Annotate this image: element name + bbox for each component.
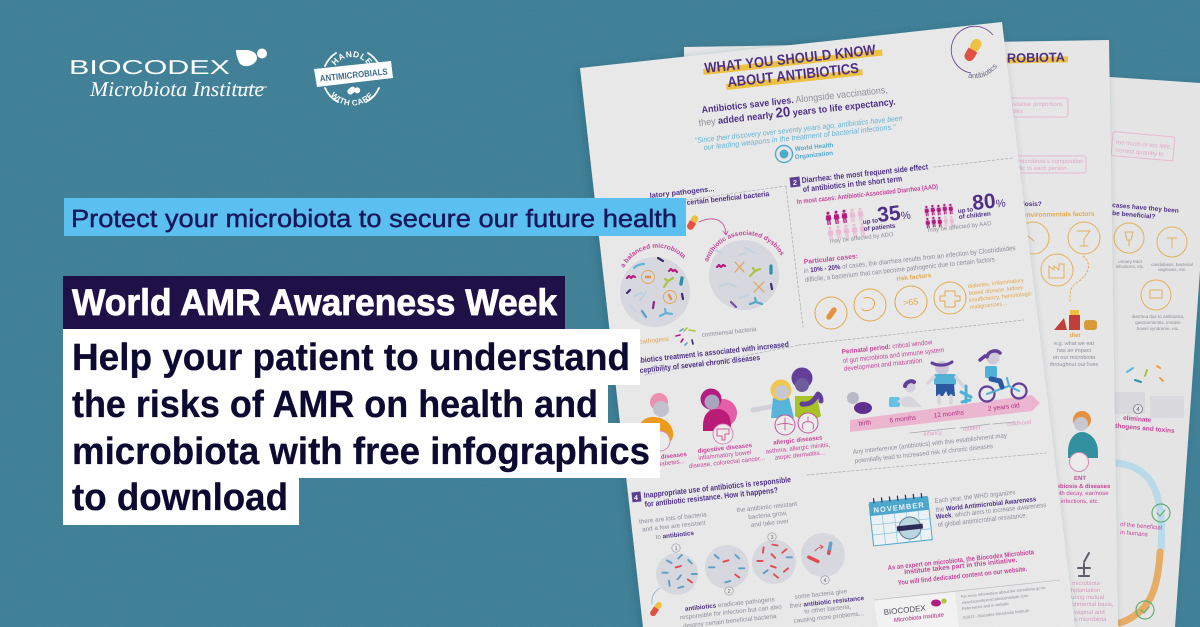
beneficial caption (1120, 521, 1162, 538)
question heading: be beneficial? (1112, 210, 1156, 221)
headline: help your patient: the risks of AMR on health and (72, 384, 598, 426)
diet caption: diet (1070, 332, 1080, 339)
condition captions: urinary tract (1118, 259, 1143, 264)
intro statement: they added nearly 20 years to life expectancy. (698, 92, 896, 129)
risk factors: >65 (903, 296, 919, 308)
calendar with November (869, 493, 932, 546)
figure: digestive disease patient (700, 388, 737, 444)
section 4 heading: 4 (634, 495, 638, 502)
resistance step captions: responsible for infection but can also (680, 603, 783, 622)
pink note boxes: microbiota's composition (1018, 158, 1084, 165)
figure: allergic disease patients (753, 368, 821, 435)
section 4 heading: Inappropriate use of antibiotics is responsible (643, 475, 792, 500)
badge: Handle antimicrobials with care (314, 51, 393, 106)
diet caption: e.g. what we eat (1054, 341, 1094, 347)
risk factors: malignancies... (969, 300, 1008, 311)
particular cases text: in 10% - 20% of cases, the diarrhea results from an infection by Clostridioides (803, 245, 1017, 275)
resistance step captions: antibiotics eradicate pathogens (685, 596, 775, 613)
footer with Biocodex logo: www.biocodexmicrobiotainstitute.com (962, 593, 1029, 605)
resistance step captions: to antibiotics (655, 530, 695, 541)
condition captions: vaginosis, etc. (1158, 267, 1186, 272)
section 2 heading (789, 162, 929, 194)
condition captions: candidiasis, bacterial (1151, 262, 1193, 267)
interference text: Any interference (antibiotics) with this establishment may (852, 432, 1008, 456)
intro statement: Antibiotics save lives. Alongside vaccinations, (701, 85, 888, 116)
ENT caption: tooth decay, ear/nose (1051, 490, 1109, 497)
timeline arrow: childhood (1006, 419, 1032, 428)
footer with Biocodex logo: ©2022 - Biocodex Microbiota Institute (963, 608, 1030, 620)
diet caption (1050, 332, 1098, 368)
resistance step captions: some bacteria give (794, 588, 848, 601)
diet caption: throughout our lives (1050, 362, 1098, 368)
eliminate caption: eliminate (1123, 415, 1152, 424)
infographic sheet: middle (684, 40, 1118, 627)
timeline arrow: infancy (923, 429, 942, 438)
sheet title: ROBIOTA (1007, 49, 1066, 65)
chronic disease labels (656, 434, 831, 470)
timeline arrow: toddler (963, 424, 981, 433)
microbiota caption: during mutual (1068, 594, 1104, 601)
timeline arrow: 2 years old (988, 402, 1020, 413)
resistance diagram: four dishes (649, 533, 845, 617)
logo: Biocodex Microbiota Institute: Microbiota Institute (89, 77, 264, 101)
ENT caption: infections, etc. (1061, 498, 1100, 505)
logo: World Health Organization: World Health (794, 142, 834, 153)
expert statement: Institute takes part in this initiative. (904, 557, 1018, 576)
footer with Biocodex logo: Microbiota Institute (893, 612, 945, 624)
timeline arrow (850, 395, 1040, 438)
title (703, 42, 883, 91)
timeline arrow: 6 months (889, 415, 917, 424)
expert statement: As an expert on microbiota, the Biocodex Microbiota (887, 549, 1035, 572)
chronic disease labels: digestive diseases (697, 442, 753, 455)
resistance step captions: and take over (750, 518, 789, 529)
tagline banner (64, 198, 686, 236)
chronic disease labels: diabetes... (656, 458, 685, 468)
badge: Handle antimicrobials with care: WITH CARE (332, 92, 373, 106)
logo: World Health Organization (776, 142, 834, 162)
WHO quote: our leading weapons in the treatment of bacterial infections." (703, 122, 896, 152)
section 2 heading: Diarrhea: the most frequent side effect (801, 162, 929, 185)
beneficial caption: of the beneficial (1120, 521, 1162, 532)
title: WHAT YOU SHOULD KNOW (704, 42, 877, 77)
condition captions (1116, 259, 1193, 331)
stat: 35% of patients: of patients (863, 223, 896, 233)
stat: 80% of children (924, 189, 1007, 234)
diagram: antibiotic associated dysbiosis: antibiotic associated dysbiosis (632, 230, 784, 303)
badge: Handle antimicrobials with care: HANDLE (331, 51, 372, 66)
WHO awareness week text: Week, which aims to increase awareness (935, 502, 1047, 521)
microbiota caption: for the vaginal and (1055, 609, 1105, 616)
illustration: growing child stages (847, 351, 1026, 414)
legend: pathogens and commensal bacteria: commensal bacteria (701, 326, 757, 339)
diet caption: on our microbiota (1053, 355, 1096, 361)
WHO awareness week text: of global antimicrobial resistance. (937, 512, 1028, 529)
probiotic bacteria icons (1127, 366, 1163, 382)
tagline banner: Protect your microbiota to secure our future health (71, 205, 677, 233)
timeline arrow: birth (858, 419, 872, 428)
WHO awareness week text (934, 489, 1047, 529)
condition captions: gastroenteritis, irritable (1135, 320, 1181, 325)
resistance step captions: bacteria grow, (748, 510, 788, 521)
microbiota caption: environmental basis, (1058, 601, 1114, 608)
section 1 heading: certain beneficial bacteria (686, 189, 771, 207)
diagram: balanced microbiota: a balanced microbiota (621, 243, 685, 268)
risk factors: diabetes, inflammatory (967, 277, 1024, 290)
diet caption: has an impact (1057, 348, 1092, 354)
resistance step captions (639, 501, 865, 627)
chronic disease labels: atopic dermatitis... (774, 449, 825, 462)
microbiota caption: microbiota (1072, 580, 1100, 587)
section 4 heading (631, 475, 792, 509)
pink note box: too much or too little, (1116, 139, 1172, 151)
resistance step captions: there are lots of bacteria (639, 511, 707, 526)
ENT caption: dysbiosis & diseases (1050, 483, 1111, 490)
diagram: antibiotic associated dysbiosis (626, 230, 784, 310)
resistance step captions: the antibiotic resistant (736, 501, 798, 514)
resistance step captions: and a few are resistant (642, 520, 706, 533)
resistance step captions: to other bacteria, (804, 603, 852, 616)
logo: Biocodex Microbiota Institute: BIOCODEX (69, 57, 230, 79)
footer with Biocodex logo (874, 580, 1060, 627)
WHO awareness week text: Each year, the WHO organizes (934, 489, 1016, 505)
infographic sheet: back right (1080, 76, 1200, 627)
stat: 35% of patients: up to (862, 217, 879, 226)
resistance diagram: four dishes: 2 (727, 589, 731, 595)
AAD subheading: In most cases: Antibiotic-Associated Diarrhea (AAD) (796, 184, 938, 206)
interference text (852, 432, 1008, 465)
pink note box (1111, 132, 1175, 161)
food icons (1054, 310, 1097, 330)
pink note boxes: bles (1012, 108, 1023, 115)
headline: help your patient: microbiota with free infographics (72, 431, 650, 473)
resistance diagram: four dishes: 4 (823, 578, 827, 584)
condition captions: infections, etc. (1116, 264, 1144, 269)
section 2 heading: of antibiotics in the short term (802, 174, 903, 194)
stat: 35% of patients: may be affected by ADO (829, 231, 894, 245)
section 3 heading: ibiotics treatment is associated with increased (638, 340, 790, 365)
headline: World AMR Awareness Week: World AMR Awareness Week (72, 282, 557, 323)
section 2 heading: 2 (793, 180, 797, 187)
risk factors: insufficiency, hemotologic (968, 290, 1032, 304)
timeline arrow: 12 months (933, 409, 965, 420)
antibiotic pill and arrow (686, 214, 728, 235)
section 1 heading (649, 184, 771, 207)
stat: 80% of children: up to (957, 206, 974, 215)
step four panels (1113, 392, 1184, 418)
question heading: cases have they been (1112, 202, 1179, 215)
microbiota caption: implantation (1068, 587, 1100, 594)
particular cases text: Particular cases: (803, 253, 858, 266)
WHO quote: "Since their discovery over seventy years ago, antibiotics have been (694, 113, 903, 145)
resistance diagram: four dishes: 1 (674, 546, 678, 552)
condition captions: bowel syndrome, etc. (1137, 326, 1179, 331)
section 3 heading (638, 340, 790, 375)
chronic disease labels: disease, colorectal cancer... (689, 455, 765, 470)
pink note box: correct quantity to (1116, 147, 1165, 158)
pink note boxes: ific to each person. (1018, 165, 1069, 172)
headline: help your patient: Help your patient to understand (72, 337, 630, 379)
question heading (1112, 202, 1179, 221)
expert statement (887, 549, 1035, 587)
legend: pathogens and commensal bacteria (638, 326, 757, 346)
stat: 35% of patients: 35% (876, 201, 912, 227)
factor circles (1017, 222, 1100, 302)
diagram: balanced microbiota (620, 243, 690, 327)
badge: Handle antimicrobials with care: ANTIMICROBIALS (319, 66, 388, 84)
pink note boxes (1008, 98, 1086, 173)
resistance step captions: causing more problems... (793, 610, 865, 625)
environmental factors: environmentals factors (1023, 211, 1095, 219)
eliminate caption (1107, 415, 1175, 435)
section dividers (645, 158, 1046, 475)
headline: help your patient (63, 329, 660, 525)
patient figure: ENT (1068, 411, 1098, 472)
risk factors (815, 272, 1032, 329)
green stamps (1136, 504, 1170, 619)
perinatal period text: Perinatal period: critical window (841, 339, 933, 356)
perinatal period text (841, 339, 945, 373)
colored arc (1116, 463, 1162, 623)
resistance step captions: their antibiotic resistance (789, 595, 865, 610)
figure: metabolic disease patient (637, 393, 673, 451)
legend: pathogens and commensal bacteria: pathogens (638, 336, 670, 346)
icon circles (1114, 223, 1187, 310)
calendar with November: NOVEMBER (873, 500, 925, 515)
chronic disease labels: asthma, allergic rhinitis, (765, 442, 831, 455)
logo: World Health Organization: Organization (794, 150, 834, 161)
WHO awareness week text: the World Antimicrobial Awareness (935, 496, 1037, 514)
expert statement: You will find dedicated content on our website. (897, 566, 1028, 587)
eliminate caption: pathogens and toxins (1107, 422, 1175, 435)
footer with Biocodex logo: References and in website (962, 601, 1010, 611)
footer with Biocodex logo: For more information about the microbiota go to: (961, 585, 1046, 599)
icon: antibiotics pill badge (950, 26, 997, 78)
beneficial caption: in humans (1120, 529, 1148, 538)
pink note boxes: relative proportions (1012, 101, 1063, 108)
logo: Biocodex Microbiota Institute (69, 48, 267, 101)
stat: 80% of children: 80% (971, 189, 1007, 215)
icon: microscope (1078, 553, 1090, 576)
section 1 heading: latory pathogens... (649, 184, 715, 200)
risk factors: risk factors (896, 272, 932, 283)
section 3 heading: ceptibility of several chronic diseases (639, 353, 761, 375)
particular cases text: difficile, a bacterium that can become pathogenic due to certain factors (804, 256, 996, 284)
ENT caption (1050, 475, 1111, 505)
chronic disease labels: t diseases (657, 451, 688, 461)
footer with Biocodex logo: BIOCODEX (883, 603, 927, 617)
perinatal period text: of gut microbiota and immune system (842, 347, 945, 365)
microbiota caption (1049, 580, 1114, 623)
stat: 80% of children: of children (958, 211, 991, 221)
step four panels: 4 (1136, 406, 1140, 413)
stat: 80% of children: may be affected by AAD (927, 220, 992, 234)
chronic disease labels: inflammatory bowel (698, 449, 752, 462)
microbiota caption: cutaneous microbiota (1049, 616, 1107, 623)
condition captions: diarrhea due to antibiotics, (1132, 314, 1184, 319)
resistance diagram: four dishes: 3 (770, 535, 774, 541)
icon: antibiotics pill badge: antibiotics (968, 64, 997, 78)
question heading: biosis? (1019, 201, 1042, 208)
headline: help your patient: to download (72, 477, 288, 519)
ENT caption: ENT (1074, 475, 1086, 482)
section 4 heading: for antibiotic resistance. How it happens? (644, 486, 779, 509)
risk factors: bowel disease, kidney (968, 284, 1024, 297)
perinatal period text: development and maturation (843, 357, 923, 373)
stat: 35% of patients (825, 201, 912, 245)
title: ABOUT ANTIBIOTICS (727, 61, 860, 91)
chronic disease labels: allergic diseases (773, 434, 823, 447)
interference text: potentially lead to increased risk of chronic diseases (854, 443, 994, 465)
